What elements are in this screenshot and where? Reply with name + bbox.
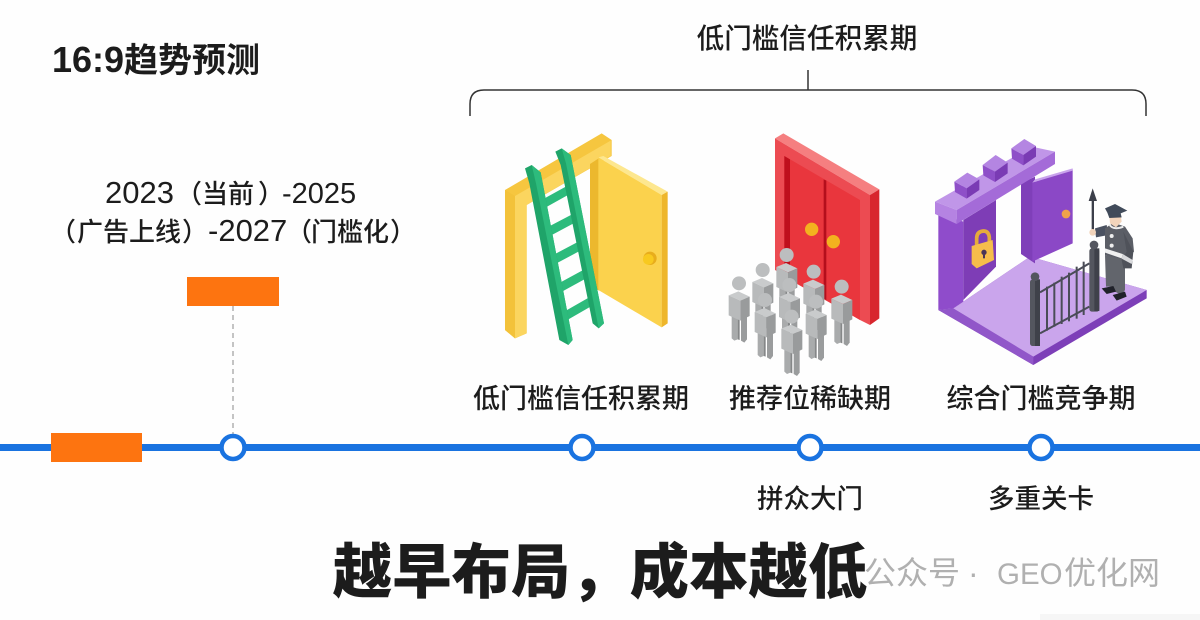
icon: purple gate with guard: [935, 139, 1147, 365]
timeline note: ）: [182, 217, 208, 247]
timeline note: [50, 175, 416, 248]
padlock: [972, 231, 994, 268]
people crowd: [729, 248, 852, 376]
bracket heading: 低门槛信任积累期: [697, 23, 917, 54]
watermark: ·: [968, 555, 979, 591]
main slogan: 越早布局，成本越低: [333, 539, 867, 606]
timeline note: （: [50, 217, 76, 247]
fence: [1030, 241, 1099, 346]
stage labels: [473, 384, 1136, 414]
timeline axis: [0, 444, 1200, 451]
timeline note: 2023: [105, 175, 174, 210]
watermark: GEO: [997, 558, 1063, 591]
icon: red double door with crowd: [729, 133, 879, 376]
icon: yellow door with ladder: [505, 133, 668, 345]
timeline nodes: [222, 436, 1052, 459]
timeline note: -2027: [208, 213, 287, 248]
timeline note: ）: [258, 179, 284, 209]
stage labels: 综合门槛竞争期: [946, 384, 1136, 414]
timeline note: ）: [390, 217, 416, 247]
stage labels: 推荐位稀缺期: [729, 384, 891, 414]
watermark: 优化网: [1064, 555, 1160, 591]
bracket heading: [470, 23, 1146, 116]
title: 16:9: [52, 39, 124, 80]
bottom right smudge: [1040, 614, 1200, 620]
timeline note: 门槛化: [311, 217, 389, 247]
orange bar raised with dashed connector: [187, 277, 279, 434]
timeline note: 广告上线: [77, 217, 181, 247]
orange bar on axis: [51, 433, 142, 462]
sub labels: 多重关卡: [988, 484, 1094, 514]
timeline note: （: [176, 179, 202, 209]
timeline note: （: [286, 217, 312, 247]
watermark: 公众号: [864, 555, 960, 591]
sub labels: 拼众大门: [757, 484, 863, 514]
guard: [1089, 188, 1134, 301]
timeline note: 当前: [202, 179, 254, 209]
sub labels: [757, 484, 1094, 514]
stage labels: 低门槛信任积累期: [473, 384, 689, 414]
title: 趋势预测: [124, 42, 260, 80]
timeline note: -2025: [282, 178, 356, 210]
